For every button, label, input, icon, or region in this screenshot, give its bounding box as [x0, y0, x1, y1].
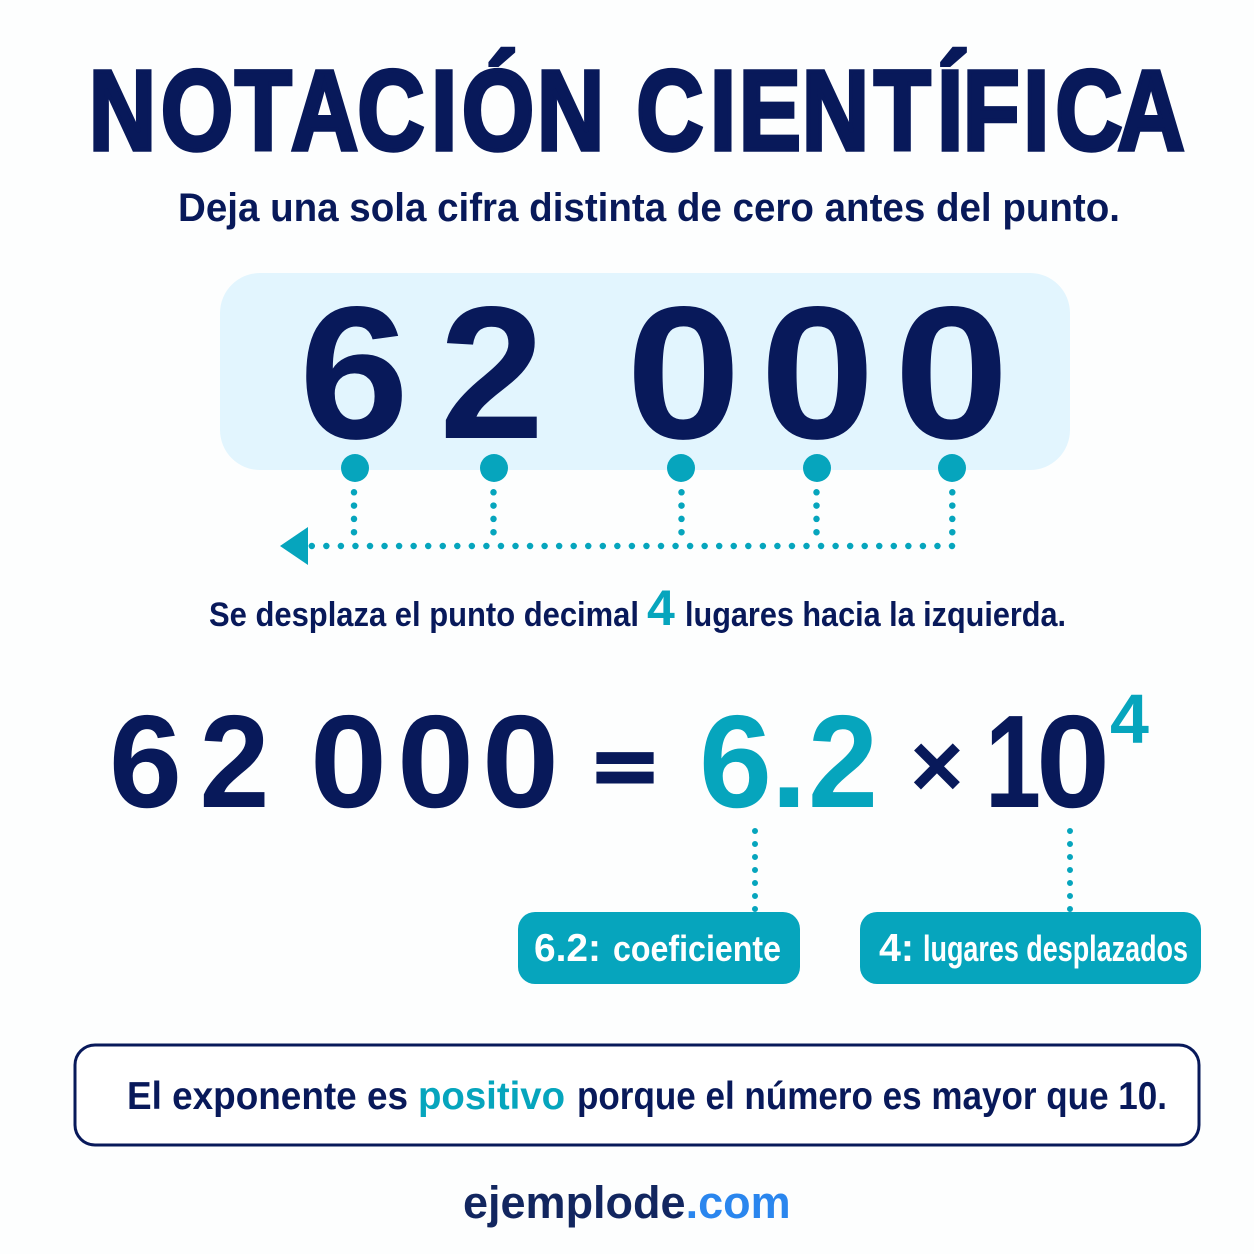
large number: 0: [626, 268, 741, 479]
callout: coefficient: 6.2:: [534, 927, 601, 970]
number 4 highlight: 4: [647, 580, 675, 636]
callout: coefficient: coeficiente: [613, 928, 781, 969]
large number: 6: [299, 268, 409, 479]
large number: 0: [894, 268, 1009, 479]
equation: 2: [200, 688, 270, 835]
footer brand: ejemplode.com: [463, 1177, 791, 1228]
equation: 6: [109, 688, 182, 835]
large number: 2: [439, 268, 544, 479]
note box: positivo: [418, 1075, 565, 1118]
equation: .: [771, 688, 807, 835]
title: NOTACIÓN CIENTÍFICA: [89, 47, 1185, 174]
note box: El exponente es: [127, 1075, 408, 1118]
equation: 1: [985, 688, 1041, 835]
decimal shift diagram: [280, 454, 966, 565]
note box: [75, 1045, 1199, 1145]
panel: number: [220, 268, 1070, 479]
shift explanation: Se desplaza el punto decimal: [209, 596, 639, 634]
equation: 0: [310, 688, 387, 835]
equation: [109, 680, 1149, 835]
equation: ×: [910, 715, 964, 817]
shift explanation end: lugares hacia la izquierda.: [685, 596, 1066, 634]
callout: places moved: 4:: [879, 927, 914, 970]
equation: 0: [397, 688, 474, 835]
connector lines: [755, 831, 1070, 910]
equation: 4: [1110, 680, 1149, 758]
subtitle: Deja una sola cifra distinta de cero antes del punto.: [178, 186, 1120, 230]
equation: 2: [808, 688, 878, 835]
equation: 0: [1036, 688, 1110, 835]
equation: 6: [699, 688, 772, 835]
callout: coefficient: [518, 912, 800, 984]
equation: 0: [482, 688, 559, 835]
note box: porque el número es mayor que 10.: [577, 1075, 1167, 1118]
callout: places moved: [860, 912, 1201, 984]
equation: =: [595, 728, 655, 808]
large number: 0: [760, 268, 875, 479]
